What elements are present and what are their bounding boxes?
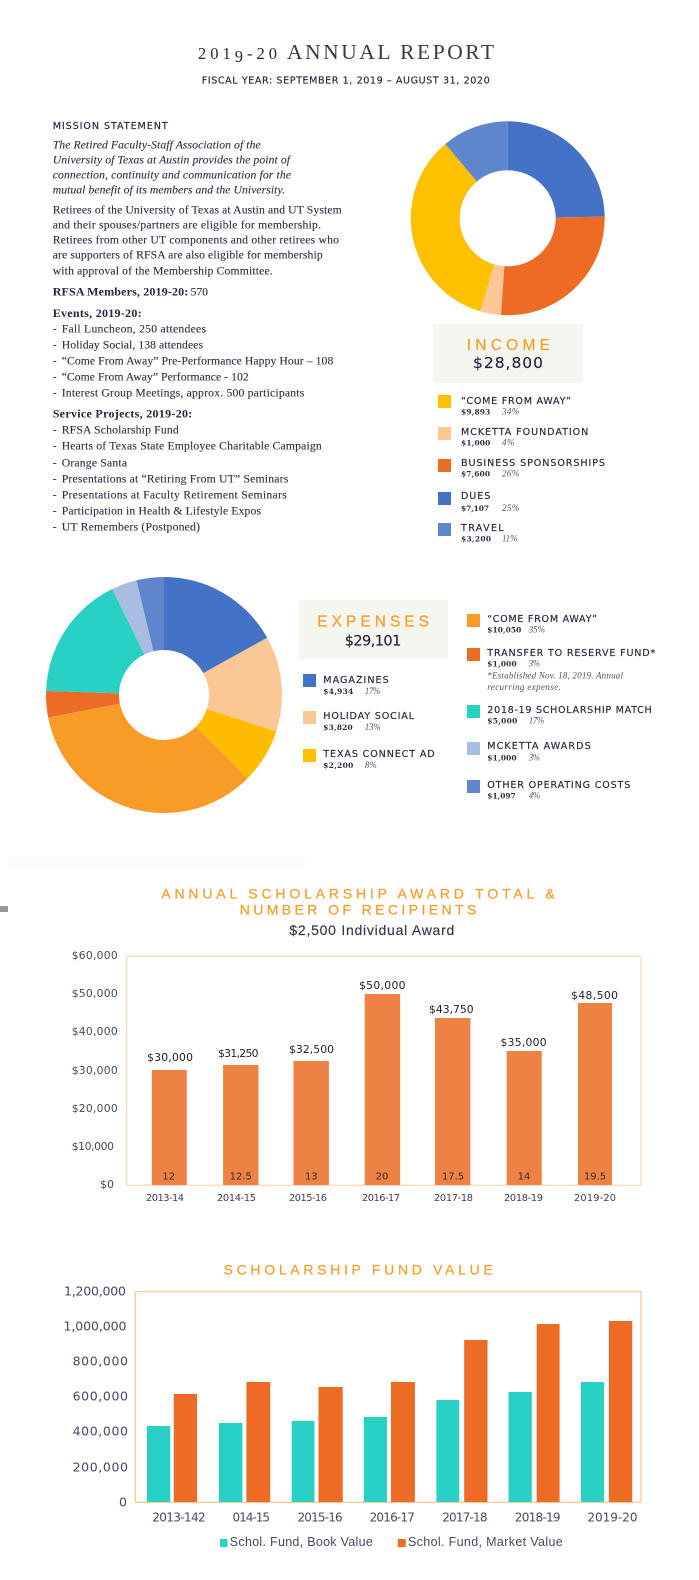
legend item: scholarship match: 17% bbox=[529, 716, 544, 726]
legend item: other operating costs: $1,097 bbox=[487, 792, 516, 801]
legend item: other operating costs: 4% bbox=[529, 791, 540, 801]
y axis labels: $10,000 bbox=[72, 1140, 114, 1153]
bar value labels: $31,250 bbox=[218, 1047, 259, 1060]
recipient counts: 14 bbox=[518, 1171, 530, 1182]
y axis labels: 800,000 bbox=[73, 1354, 128, 1368]
income total panel: $28,800 bbox=[473, 354, 543, 372]
events list: Holiday Social, 138 attendees bbox=[62, 339, 203, 352]
mission text: connection, continuity and communication for the bbox=[53, 169, 291, 182]
x axis labels: 2019-20 bbox=[574, 1193, 616, 1204]
events list: Fall Luncheon, 250 attendees bbox=[62, 323, 206, 336]
legend item: transfer to reserve fund: $1,000 bbox=[487, 660, 517, 669]
mission text: The Retired Faculty-Staff Association of the bbox=[53, 139, 261, 152]
y axis labels: $30,000 bbox=[72, 1064, 118, 1077]
legend item: mcketta awards: 3% bbox=[528, 753, 540, 763]
legend item: holiday social: HOLIDAY SOCIAL bbox=[323, 711, 415, 722]
legend item: come from away bbox=[438, 395, 571, 417]
legend item: texas connect ad: 8% bbox=[365, 760, 377, 770]
bar value labels: $35,000 bbox=[500, 1036, 547, 1049]
chart legend bbox=[220, 1535, 563, 1549]
service projects list: Service Projects, 2019-20: bbox=[53, 407, 192, 421]
events list: - bbox=[53, 323, 57, 336]
legend item: business sponsorships: $7,600 bbox=[461, 470, 490, 479]
service projects list: - bbox=[53, 440, 57, 453]
eligibility text: with approval of the Membership Committee. bbox=[53, 265, 273, 278]
mission text: University of Texas at Austin provides the point of bbox=[53, 154, 292, 167]
income total panel: INCOME bbox=[467, 337, 550, 354]
chart legend: Schol. Fund, Book Value bbox=[230, 1535, 373, 1549]
income donut chart bbox=[411, 121, 605, 315]
legend item: come from away: 34% bbox=[501, 407, 519, 417]
legend item: mcketta foundation: MCKETTA FOUNDATION bbox=[461, 427, 588, 438]
legend item: texas connect ad: $2,200 bbox=[323, 761, 353, 770]
expenses donut chart bbox=[46, 577, 282, 813]
service projects list: - bbox=[53, 521, 57, 534]
heading: annual scholarship award chart: ANNUAL SCHOLARSHIP AWARD TOTAL & bbox=[161, 885, 555, 901]
legend item: mcketta awards bbox=[467, 741, 591, 763]
legend item: other operating costs: OTHER OPERATING COSTS bbox=[487, 780, 630, 791]
y axis labels bbox=[72, 949, 118, 1191]
y axis labels: 600,000 bbox=[73, 1388, 128, 1404]
service projects list: - bbox=[53, 424, 57, 437]
y axis labels: $50,000 bbox=[72, 987, 118, 1000]
legend item: business sponsorships: BUSINESS SPONSORSHIPS bbox=[461, 458, 605, 469]
legend item: dues bbox=[438, 491, 519, 513]
subtitle: fiscal year: FISCAL YEAR: SEPTEMBER 1, 2019 – AUGUST 31, 2020 bbox=[202, 76, 490, 87]
legend item: mcketta foundation bbox=[438, 427, 588, 448]
members count: RFSA Members, 2019-20: bbox=[53, 285, 188, 299]
legend item: transfer to reserve fund: *Established Nov. 18, 2019. Annual bbox=[487, 671, 623, 681]
x axis labels bbox=[146, 1193, 616, 1204]
events list bbox=[53, 306, 333, 400]
bar value labels bbox=[147, 979, 618, 1064]
service projects list: - bbox=[53, 473, 57, 486]
legend item: transfer to reserve fund: recurring expense. bbox=[487, 682, 561, 692]
service projects list: Orange Santa bbox=[62, 457, 128, 470]
title: 9 bbox=[235, 47, 247, 66]
legend item: mcketta awards: $1,000 bbox=[487, 754, 517, 763]
legend item: transfer to reserve fund: TRANSFER TO RESERVE FUND* bbox=[486, 648, 656, 659]
legend item: other operating costs bbox=[467, 780, 630, 801]
x axis labels: 2013-142 bbox=[152, 1510, 206, 1524]
bar value labels: $30,000 bbox=[147, 1051, 193, 1064]
x axis labels bbox=[152, 1510, 638, 1524]
y axis labels: $20,000 bbox=[72, 1102, 118, 1115]
heading: annual scholarship award chart: NUMBER OF RECIPIENTS bbox=[240, 901, 476, 917]
title: -20 bbox=[247, 44, 281, 63]
legend item: magazines: $4,934 bbox=[323, 687, 353, 696]
y axis labels: 400,000 bbox=[73, 1424, 128, 1438]
events list: Events, 2019-20: bbox=[53, 306, 142, 320]
members count: 570 bbox=[190, 286, 208, 299]
income legend bbox=[438, 395, 605, 544]
service projects list: - bbox=[53, 457, 57, 470]
legend item: holiday social bbox=[303, 711, 415, 732]
x axis labels: 2019-20 bbox=[587, 1510, 638, 1524]
eligibility text bbox=[53, 204, 342, 278]
title: 201 bbox=[198, 44, 235, 63]
x axis labels: 2018-19 bbox=[515, 1510, 560, 1524]
y axis labels: 1,000,000 bbox=[64, 1318, 127, 1334]
legend item: magazines: 17% bbox=[365, 686, 380, 696]
y axis labels: $60,000 bbox=[72, 949, 118, 962]
legend item: come from away: $9,893 bbox=[461, 408, 490, 417]
expenses legend, left column bbox=[303, 674, 435, 770]
y axis labels: $0 bbox=[100, 1178, 114, 1191]
eligibility text: and their spouses/partners are eligible for membership. bbox=[53, 219, 321, 232]
legend item: mcketta foundation: $1,000 bbox=[461, 439, 490, 448]
bar value labels: $32,500 bbox=[289, 1043, 334, 1056]
x axis labels: 2017-18 bbox=[442, 1510, 488, 1524]
title bbox=[198, 40, 494, 66]
legend item: mcketta awards: MCKETTA AWARDS bbox=[487, 741, 591, 752]
bar chart: scholarship fund value bbox=[64, 1284, 641, 1549]
service projects list: Presentations at Faculty Retirement Seminars bbox=[62, 489, 287, 502]
x axis labels: 2016-17 bbox=[370, 1510, 415, 1524]
legend item: mcketta foundation: 4% bbox=[502, 438, 514, 448]
recipient counts: 13 bbox=[305, 1171, 318, 1182]
recipient counts: 19.5 bbox=[584, 1171, 606, 1182]
legend item: dues: $7,107 bbox=[461, 504, 489, 513]
eligibility text: Retirees from other UT components and other retirees who bbox=[53, 234, 339, 247]
recipient counts: 12 bbox=[162, 1171, 175, 1182]
legend item: transfer to reserve fund bbox=[467, 648, 656, 692]
legend item: come from away: $10,050 bbox=[487, 626, 521, 635]
events list: - bbox=[53, 371, 57, 384]
recipient counts: 20 bbox=[376, 1171, 388, 1182]
legend item: magazines: MAGAZINES bbox=[323, 675, 389, 686]
y axis labels: 0 bbox=[119, 1494, 127, 1510]
legend item: travel: 11% bbox=[502, 534, 518, 544]
legend item: texas connect ad bbox=[303, 749, 435, 770]
heading: annual scholarship award chart bbox=[161, 885, 555, 917]
x axis labels: 2014-15 bbox=[217, 1193, 256, 1204]
events list: - bbox=[53, 339, 57, 352]
bar chart: annual scholarship award total bbox=[72, 949, 641, 1204]
expenses legend, right column bbox=[467, 614, 656, 801]
legend item: dues: 25% bbox=[502, 503, 519, 513]
x axis labels: 014-15 bbox=[232, 1510, 270, 1524]
chart legend: Schol. Fund, Market Value bbox=[408, 1535, 563, 1549]
recipient counts: 12.5 bbox=[230, 1171, 252, 1182]
mission statement panel bbox=[53, 121, 342, 534]
legend item: scholarship match: 2018-19 SCHOLARSHIP MATCH bbox=[487, 705, 652, 716]
legend item: holiday social: $3,820 bbox=[323, 723, 353, 732]
x axis labels: 2018-19 bbox=[504, 1193, 543, 1204]
events list: “Come From Away” Performance - 102 bbox=[62, 371, 249, 384]
bar value labels: $50,000 bbox=[359, 979, 406, 992]
legend item: transfer to reserve fund: 3% bbox=[528, 659, 540, 669]
mission text bbox=[53, 139, 292, 197]
service projects list bbox=[53, 407, 322, 534]
service projects list: UT Remembers (Postponed) bbox=[62, 521, 200, 534]
x axis labels: 2015-16 bbox=[298, 1510, 343, 1524]
title: ANNUAL REPORT bbox=[287, 40, 494, 64]
bar value labels: $43,750 bbox=[429, 1003, 474, 1016]
recipient counts: 17.5 bbox=[442, 1171, 464, 1182]
y axis labels bbox=[64, 1284, 128, 1510]
legend item: come from away: “COME FROM AWAY” bbox=[487, 614, 597, 625]
legend item: business sponsorships: 26% bbox=[502, 469, 519, 479]
legend item: magazines bbox=[303, 674, 389, 696]
heading: mission statement: MISSION STATEMENT bbox=[53, 121, 168, 132]
y axis labels: 1,200,000 bbox=[64, 1284, 126, 1298]
expenses total panel: EXPENSES bbox=[317, 614, 429, 631]
service projects list: Hearts of Texas State Employee Charitable Campaign bbox=[62, 440, 322, 453]
legend item: come from away bbox=[467, 614, 597, 635]
legend item: come from away: “COME FROM AWAY” bbox=[461, 396, 571, 407]
legend item: scholarship match bbox=[467, 705, 652, 726]
service projects list: Participation in Health & Lifestyle Expos bbox=[62, 505, 261, 518]
legend item: texas connect ad: TEXAS CONNECT AD bbox=[322, 749, 435, 760]
x axis labels: 2016-17 bbox=[362, 1193, 400, 1204]
legend item: come from away: 35% bbox=[528, 625, 545, 635]
events list: “Come From Away” Pre-Performance Happy Hour – 108 bbox=[62, 355, 333, 368]
bars: market value bbox=[174, 1321, 632, 1502]
events list: - bbox=[53, 387, 57, 400]
subheading: individual award: $2,500 Individual Award bbox=[289, 922, 454, 938]
recipient counts bbox=[162, 1171, 606, 1182]
legend item: business sponsorships bbox=[438, 458, 605, 479]
bars: book value bbox=[147, 1382, 604, 1502]
legend item: scholarship match: $5,000 bbox=[487, 717, 517, 726]
legend item: travel: $3,200 bbox=[461, 535, 491, 544]
eligibility text: Retirees of the University of Texas at Austin and UT System bbox=[53, 204, 342, 217]
expenses total panel bbox=[298, 600, 448, 659]
eligibility text: are supporters of RFSA are also eligible for membership bbox=[53, 249, 323, 262]
y axis labels: 200,000 bbox=[73, 1460, 128, 1474]
events list: Interest Group Meetings, approx. 500 participants bbox=[62, 387, 305, 400]
bars bbox=[152, 994, 612, 1185]
service projects list: - bbox=[53, 505, 57, 518]
heading: scholarship fund value: SCHOLARSHIP FUND VALUE bbox=[224, 1261, 493, 1277]
x axis labels: 2013-14 bbox=[146, 1193, 184, 1204]
legend item: travel: TRAVEL bbox=[460, 523, 504, 534]
legend item: holiday social: 13% bbox=[365, 722, 381, 732]
x axis labels: 2017-18 bbox=[434, 1193, 473, 1204]
income total panel bbox=[433, 324, 583, 383]
y axis labels: $40,000 bbox=[72, 1025, 118, 1038]
mission text: mutual benefit of its members and the University. bbox=[53, 184, 285, 197]
x axis labels: 2015-16 bbox=[289, 1193, 327, 1204]
service projects list: RFSA Scholarship Fund bbox=[62, 424, 179, 437]
legend item: travel bbox=[438, 523, 518, 544]
service projects list: - bbox=[53, 489, 57, 502]
bar value labels: $48,500 bbox=[571, 989, 618, 1002]
service projects list: Presentations at “Retiring From UT” Seminars bbox=[62, 473, 289, 486]
events list: - bbox=[53, 355, 57, 368]
legend item: dues: DUES bbox=[461, 491, 490, 502]
expenses total panel: $29,101 bbox=[345, 633, 401, 649]
